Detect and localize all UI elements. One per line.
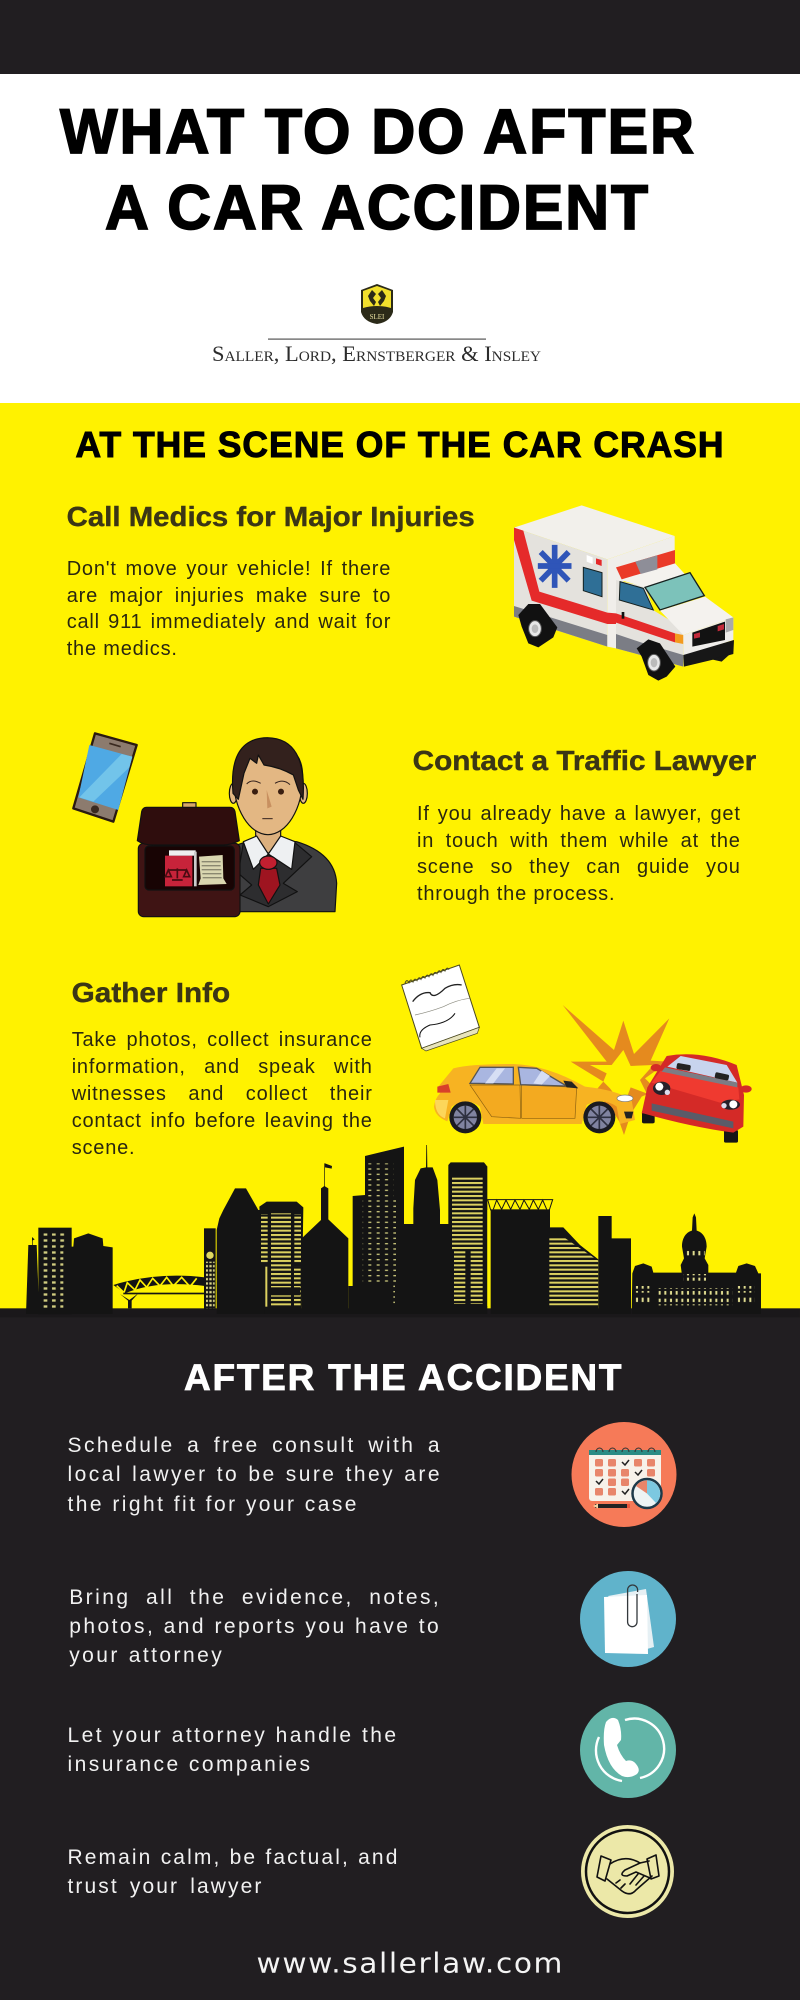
text block: free consult: the right fit for your case (68, 1493, 359, 1516)
heading: at the scene: AT THE SCENE OF THE CAR CRASH (76, 424, 724, 465)
text block: call medics: call 911 immediately and wait for (67, 611, 391, 633)
text block: contact a lawyer (417, 803, 741, 905)
text block: contact a lawyer: through the process. (417, 883, 615, 905)
heading: gather info: Gather Info (72, 977, 230, 1008)
text block: remain calm: Remain calm, be factual, and (68, 1846, 400, 1869)
icon: briefcase (137, 803, 240, 917)
text block: gather info: contact info before leaving the (72, 1110, 373, 1132)
icon: lawyer with briefcase and phone (73, 733, 337, 917)
text block: gather info: witnesses and collect their (72, 1083, 373, 1105)
icon: explosion (563, 1005, 669, 1135)
text block: call medics (67, 558, 391, 660)
icon: shield (361, 284, 393, 324)
text block: contact a lawyer: in touch with them while at the (417, 830, 741, 852)
text block: gather info: scene. (72, 1137, 135, 1159)
heading: contact a traffic lawyer: Contact a Traffic Lawyer (413, 745, 757, 776)
heading: after the accident: AFTER THE ACCIDENT (184, 1357, 622, 1398)
text block: call medics: Don't move your vehicle! If there (67, 558, 391, 580)
text block: bring evidence: your attorney (69, 1644, 224, 1667)
panel: top dark band (0, 0, 800, 74)
icon: car crash (434, 1005, 752, 1143)
skyline (0, 1145, 800, 1317)
text block: bring evidence: Bring all the evidence, notes, (69, 1586, 441, 1609)
text block: bring evidence (69, 1586, 441, 1667)
text block: gather info: information, and speak with (72, 1056, 373, 1078)
text block: gather info (72, 1029, 373, 1159)
icon: handshake (581, 1825, 674, 1918)
text block: free consult: Schedule a free consult with a (68, 1434, 442, 1457)
icon: notepad (402, 965, 479, 1051)
text block: remain calm (68, 1846, 400, 1898)
icon: star of life (541, 548, 569, 585)
text block: let attorney handle: Let your attorney handle the (68, 1724, 398, 1747)
text block: call medics: the medics. (67, 638, 178, 660)
icon: red car (642, 1054, 752, 1143)
icon: paper clip notes (580, 1571, 676, 1667)
footer url: www.sallerlaw.com (256, 1947, 564, 1980)
text block: gather info: Take photos, collect insurance (72, 1029, 373, 1051)
panel: dark after section (0, 1317, 800, 2000)
title: WHAT TO DO AFTER (60, 97, 696, 167)
logo: law firm: Saller, Lord, Ernstberger & Insley (212, 341, 541, 366)
icon: telephone (580, 1702, 676, 1798)
text block: contact a lawyer: scene so they can guide you (417, 856, 741, 878)
text block: free consult (68, 1434, 442, 1516)
icon: shield: SLEI (370, 313, 385, 321)
title (60, 97, 696, 243)
icon: man in suit (229, 738, 337, 912)
panel: yellow scene section (0, 403, 800, 1317)
heading: call medics: Call Medics for Major Injuries (67, 501, 475, 532)
text block: let attorney handle: insurance companies (68, 1753, 312, 1776)
icon: calendar (572, 1422, 676, 1527)
logo: law firm (212, 284, 541, 366)
text block: bring evidence: photos, and reports you have to (69, 1615, 441, 1638)
text block: let attorney handle (68, 1724, 398, 1776)
text block: remain calm: trust your lawyer (68, 1875, 264, 1898)
text block: contact a lawyer: If you already have a lawyer, get (417, 803, 741, 825)
icon: yellow car (434, 1064, 635, 1133)
text block: call medics: are major injuries make sure to (67, 584, 391, 606)
icon: ambulance (514, 505, 734, 681)
text block: free consult: local lawyer to be sure they are (68, 1463, 442, 1486)
panel: white title area (0, 74, 800, 403)
icon: smartphone (73, 733, 137, 822)
title: A CAR ACCIDENT (105, 173, 650, 243)
